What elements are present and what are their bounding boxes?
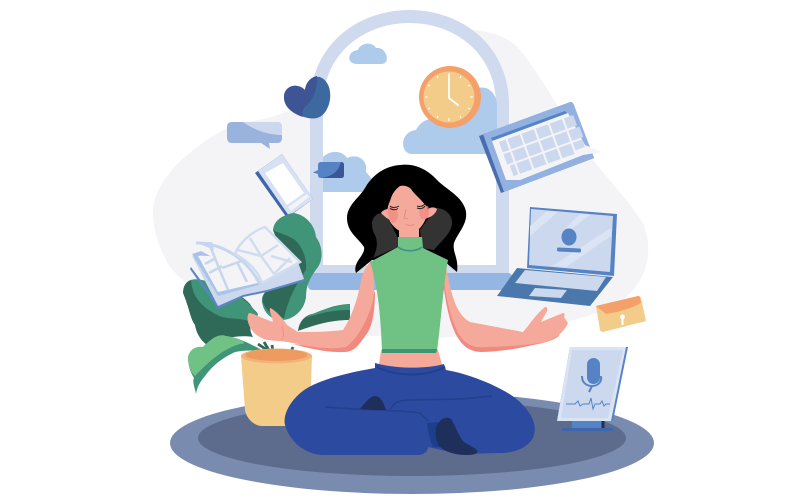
shirt collar line xyxy=(398,247,422,251)
speech bubble: small blue xyxy=(313,162,344,178)
right arm xyxy=(441,262,568,352)
hair xyxy=(347,165,466,273)
book left page grid xyxy=(205,246,250,290)
eyes and face details xyxy=(390,204,425,210)
clock xyxy=(419,66,481,128)
mic stand base xyxy=(562,428,613,431)
pants xyxy=(285,363,535,455)
pants waistband shading xyxy=(377,367,445,374)
laptop keyboard xyxy=(515,270,606,291)
book cover xyxy=(190,267,305,309)
book xyxy=(190,227,305,309)
envelope xyxy=(596,296,646,332)
plant: pot xyxy=(241,356,312,426)
cloud: left behind bubble xyxy=(323,152,380,192)
left arm xyxy=(248,261,375,352)
plant: left leaf highlight xyxy=(191,279,258,322)
tablet device xyxy=(255,154,313,218)
neck xyxy=(399,222,419,243)
shirt xyxy=(370,237,448,352)
cloud: top xyxy=(349,44,387,64)
window xyxy=(308,16,512,290)
waveform xyxy=(566,398,610,409)
plant: right leaf xyxy=(298,304,350,331)
plant: upper leaf shadow xyxy=(263,230,306,318)
foot xyxy=(436,418,477,455)
pants fold lines xyxy=(325,396,492,421)
clock ticks xyxy=(425,73,473,121)
face xyxy=(387,186,427,233)
clock hands xyxy=(449,75,458,105)
book right page grid xyxy=(238,238,292,274)
sock xyxy=(427,422,445,447)
mic capsule xyxy=(587,358,600,384)
cheeks xyxy=(388,206,429,223)
mic stand xyxy=(572,420,602,428)
calendar board xyxy=(479,102,594,193)
woman xyxy=(248,165,568,455)
laptop screen glare xyxy=(530,211,611,267)
window interior xyxy=(323,23,496,272)
laptop xyxy=(497,207,617,306)
window sill xyxy=(310,265,509,277)
calendar cells xyxy=(499,114,588,177)
ears xyxy=(381,207,437,220)
plant: left leaf xyxy=(183,280,258,345)
window sill base xyxy=(308,273,512,290)
cloud: behind clock xyxy=(403,87,497,154)
laptop trackpad xyxy=(529,288,567,298)
plant: lower light leaf xyxy=(188,335,270,394)
background blob xyxy=(153,30,648,338)
mic frame xyxy=(557,347,628,421)
rug xyxy=(170,392,654,494)
mic holder xyxy=(582,376,601,392)
small foot xyxy=(360,396,386,410)
laptop screen xyxy=(527,207,617,276)
waist xyxy=(378,350,444,372)
book left page xyxy=(192,251,262,296)
hair shadow xyxy=(372,208,452,258)
book right page xyxy=(235,227,300,283)
shirt hem xyxy=(382,349,437,353)
plant: stems xyxy=(258,342,293,352)
laptop avatar xyxy=(562,228,576,246)
envelope flap xyxy=(596,296,641,314)
calendar xyxy=(479,102,602,193)
speech bubble: upper left xyxy=(227,122,282,149)
microphone panel xyxy=(557,347,628,431)
book pages underside xyxy=(192,256,304,306)
plant: pot soil rim xyxy=(241,348,312,364)
book back page xyxy=(196,243,260,284)
envelope lock xyxy=(620,314,625,325)
plant: upper big leaf xyxy=(262,213,322,320)
window arch frame xyxy=(316,16,502,275)
laptop base xyxy=(497,268,613,306)
calendar page xyxy=(492,113,602,180)
laptop name bar xyxy=(557,247,581,253)
heart xyxy=(284,76,330,118)
plant xyxy=(183,213,350,426)
